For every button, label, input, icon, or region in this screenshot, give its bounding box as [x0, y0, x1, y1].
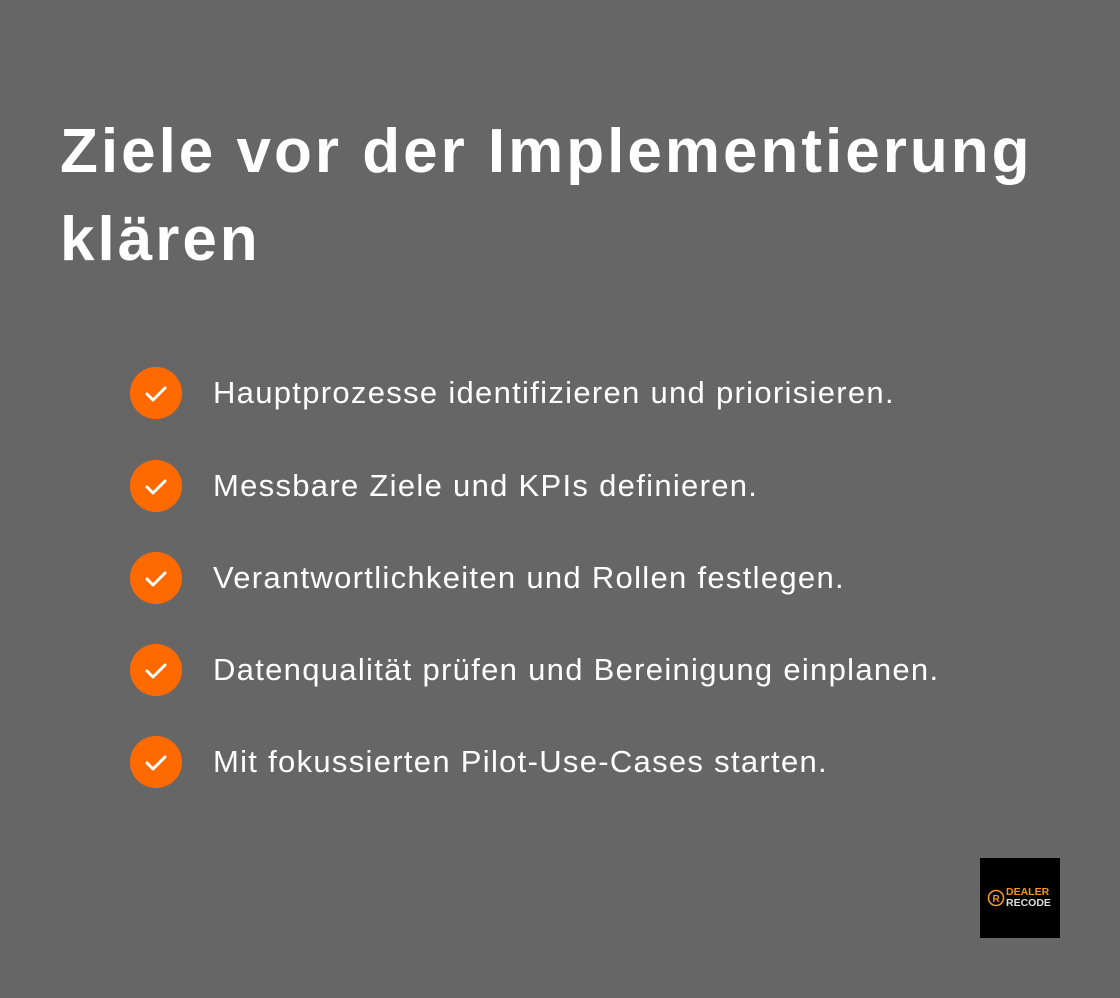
item 2 [130, 460, 758, 512]
item 3: Verantwortlichkeiten und Rollen festlegen. [213, 560, 845, 595]
title: klären [60, 205, 261, 274]
icon: check [130, 644, 182, 696]
item 4: Datenqualität prüfen und Bereinigung einplanen. [213, 652, 939, 687]
icon: check [130, 736, 182, 788]
icon: check [130, 552, 182, 604]
title: Ziele vor der Implementierung [60, 117, 1032, 186]
item 5 [130, 736, 828, 788]
item 4 [130, 644, 939, 696]
icon: check [130, 367, 182, 419]
item 1 [130, 367, 895, 419]
title [60, 117, 1032, 274]
logo: R [992, 894, 1000, 905]
logo: RECODE [1006, 897, 1051, 909]
icon: check [130, 460, 182, 512]
logo: DEALER [1006, 886, 1050, 898]
item 3 [130, 552, 845, 604]
item 1: Hauptprozesse identifizieren und priorisieren. [213, 375, 895, 410]
item 2: Messbare Ziele und KPIs definieren. [213, 468, 758, 503]
item 5: Mit fokussierten Pilot-Use-Cases starten. [213, 744, 828, 779]
logo [980, 858, 1060, 938]
